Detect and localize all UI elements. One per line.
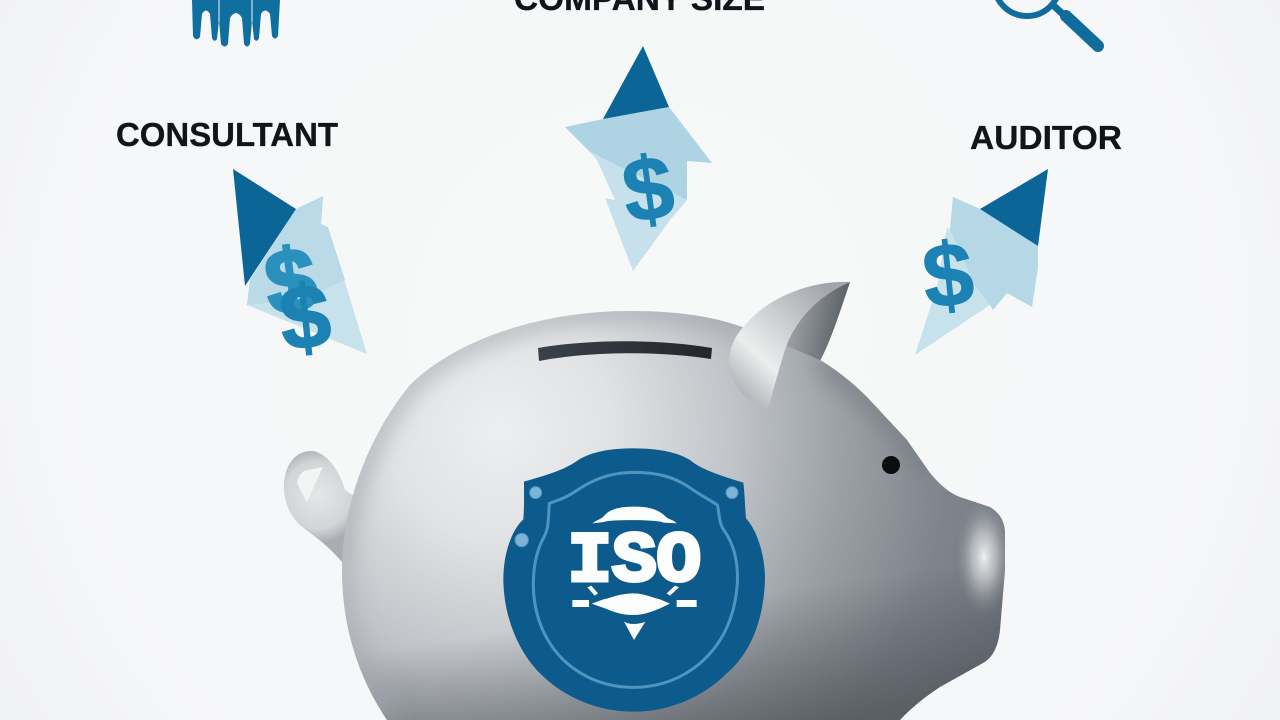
dollar sign: back: $ <box>259 229 323 335</box>
arrow: auditor cost <box>915 169 1048 355</box>
dollar sign: $ <box>918 224 978 328</box>
pig eye <box>882 456 900 474</box>
rivets <box>515 487 738 547</box>
icon: consultant people <box>192 0 280 46</box>
pig ear inner <box>770 282 850 361</box>
dollar sign: $ <box>617 137 680 243</box>
ISO emblem <box>568 507 701 640</box>
arrow: consultant cost <box>233 169 367 370</box>
heading: consultant: CONSULTANT <box>116 116 338 153</box>
pig body <box>320 290 1020 720</box>
ISO shield badge <box>503 448 765 712</box>
dollar sign: front: $ <box>275 266 335 370</box>
coin slot <box>538 341 712 361</box>
pig ear outer <box>729 282 850 410</box>
pig tail <box>284 451 360 570</box>
heading: auditor: AUDITOR <box>970 119 1122 156</box>
piggy bank <box>284 282 1020 720</box>
shield shape <box>503 448 765 712</box>
icon: magnifying glass <box>994 0 1098 46</box>
ISO emblem: ISO <box>568 522 701 602</box>
shield inner outline <box>533 472 738 687</box>
arrow: company size cost <box>565 46 712 271</box>
